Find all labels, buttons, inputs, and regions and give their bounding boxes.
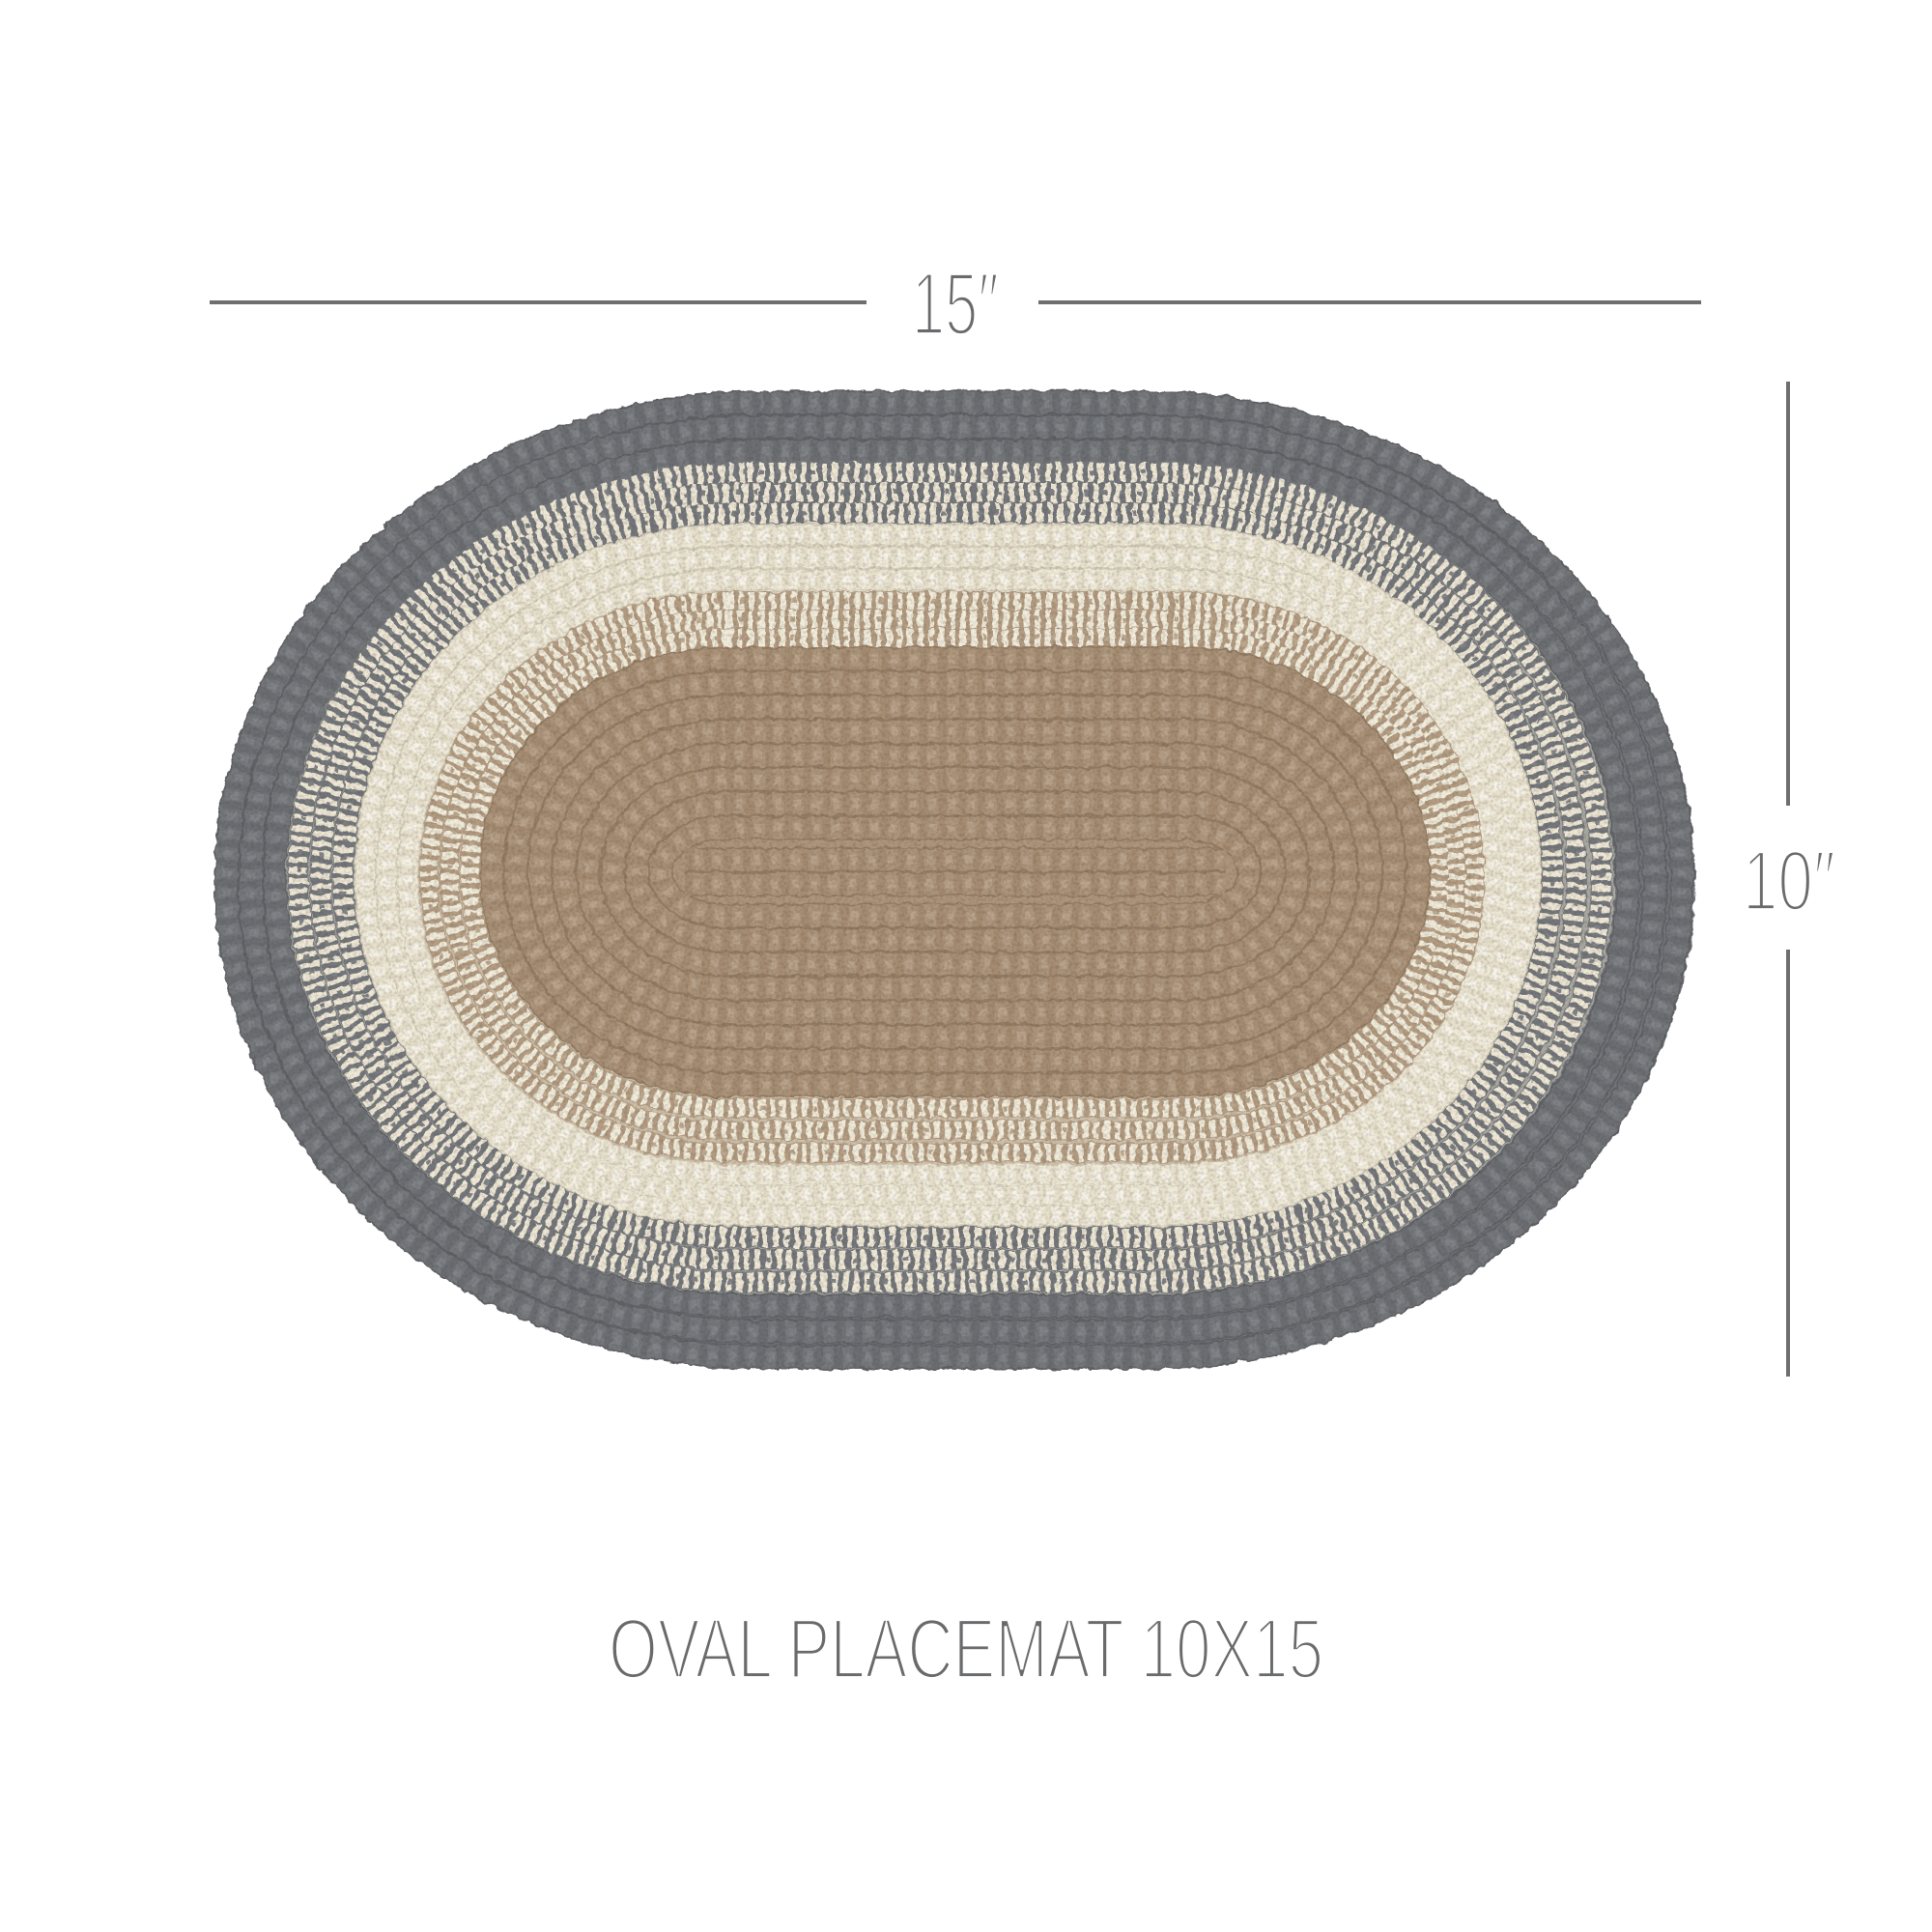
braided oval placemat	[214, 391, 1695, 1370]
label: 15 inches: 15″	[912, 255, 999, 354]
cream band	[355, 524, 1540, 1226]
height dimension: 10 inches	[1743, 382, 1835, 1377]
tan and cream tweed band	[418, 591, 1485, 1164]
width dimension: 15 inches	[210, 255, 1701, 354]
outer grey band	[214, 391, 1695, 1370]
solid tan centre	[480, 647, 1430, 1096]
grey and cream tweed band	[287, 462, 1614, 1293]
caption: OVAL PLACEMAT 10X15	[609, 1601, 1323, 1696]
label: 10 inches: 10″	[1743, 833, 1835, 928]
